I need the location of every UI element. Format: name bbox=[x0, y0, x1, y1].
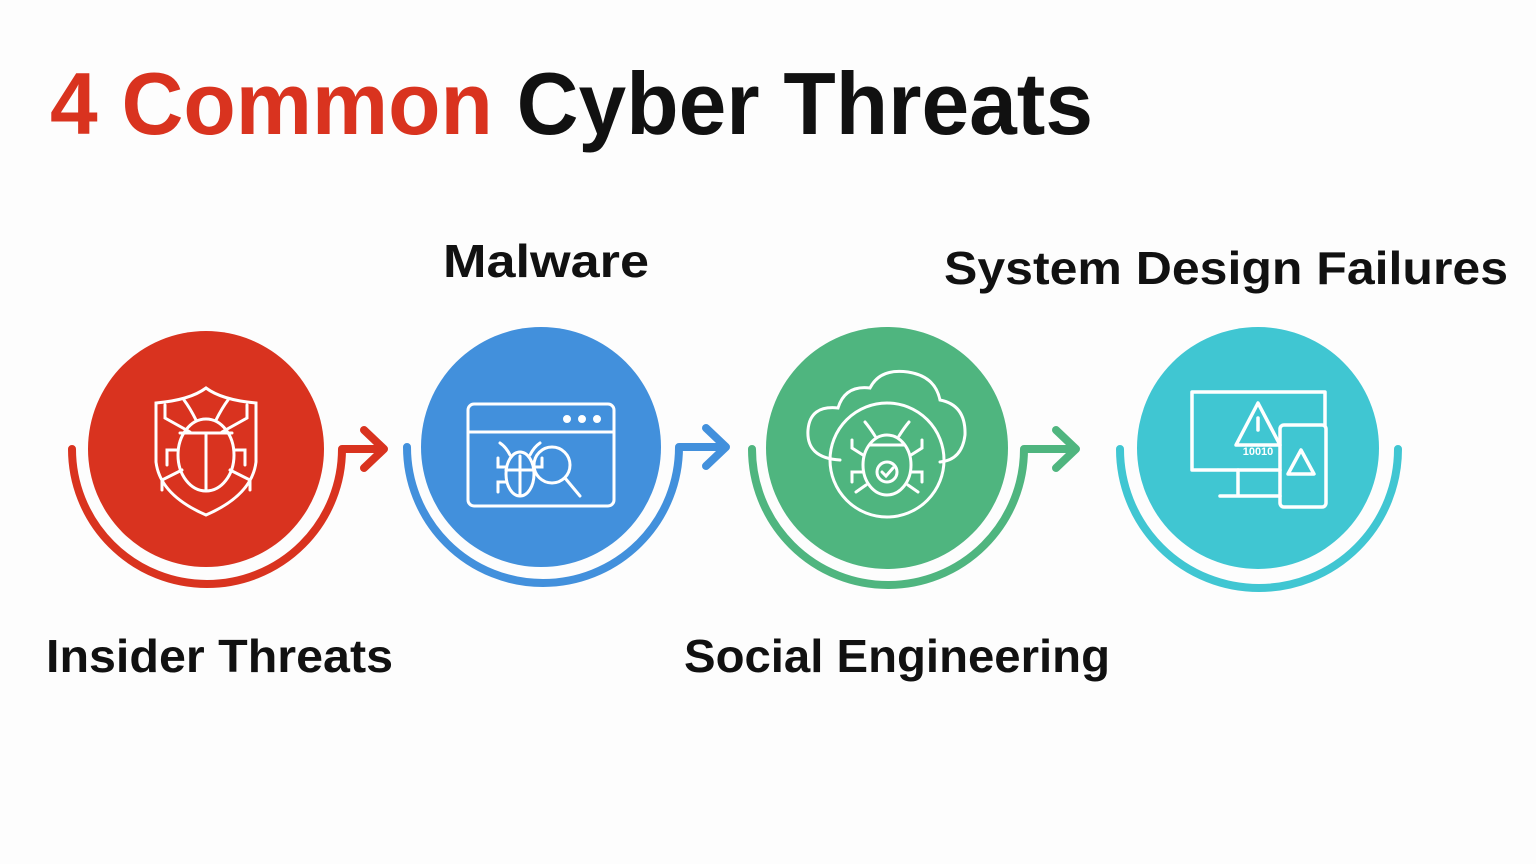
circle blue bbox=[421, 327, 661, 567]
icon: shield bug bbox=[156, 388, 256, 515]
step 2: malware bbox=[407, 235, 726, 583]
step 4: system design failures bbox=[944, 242, 1508, 588]
circle red bbox=[88, 331, 324, 567]
icon: browser bug search bbox=[468, 404, 614, 506]
label: insider threats: Insider Threats bbox=[46, 630, 393, 682]
circle teal bbox=[1137, 327, 1379, 569]
step 3: social engineering bbox=[684, 327, 1110, 682]
label: system design failures: System Design Failures bbox=[944, 242, 1508, 294]
icon: monitor phone warning bbox=[1192, 392, 1326, 507]
label: social engineering: Social Engineering bbox=[684, 630, 1110, 682]
label: malware: Malware bbox=[443, 235, 649, 287]
title: 4 Common Cyber Threats bbox=[50, 54, 1093, 153]
arc arrow blue bbox=[407, 428, 726, 583]
step 4: system design failures: 10010 bbox=[1243, 446, 1273, 458]
circle green bbox=[766, 327, 1008, 569]
step 1: insider threats bbox=[46, 331, 393, 682]
icon: cloud bug bbox=[808, 371, 965, 517]
arc arrow red bbox=[72, 430, 384, 584]
arc teal bbox=[1120, 449, 1398, 588]
arc arrow green bbox=[752, 430, 1076, 585]
